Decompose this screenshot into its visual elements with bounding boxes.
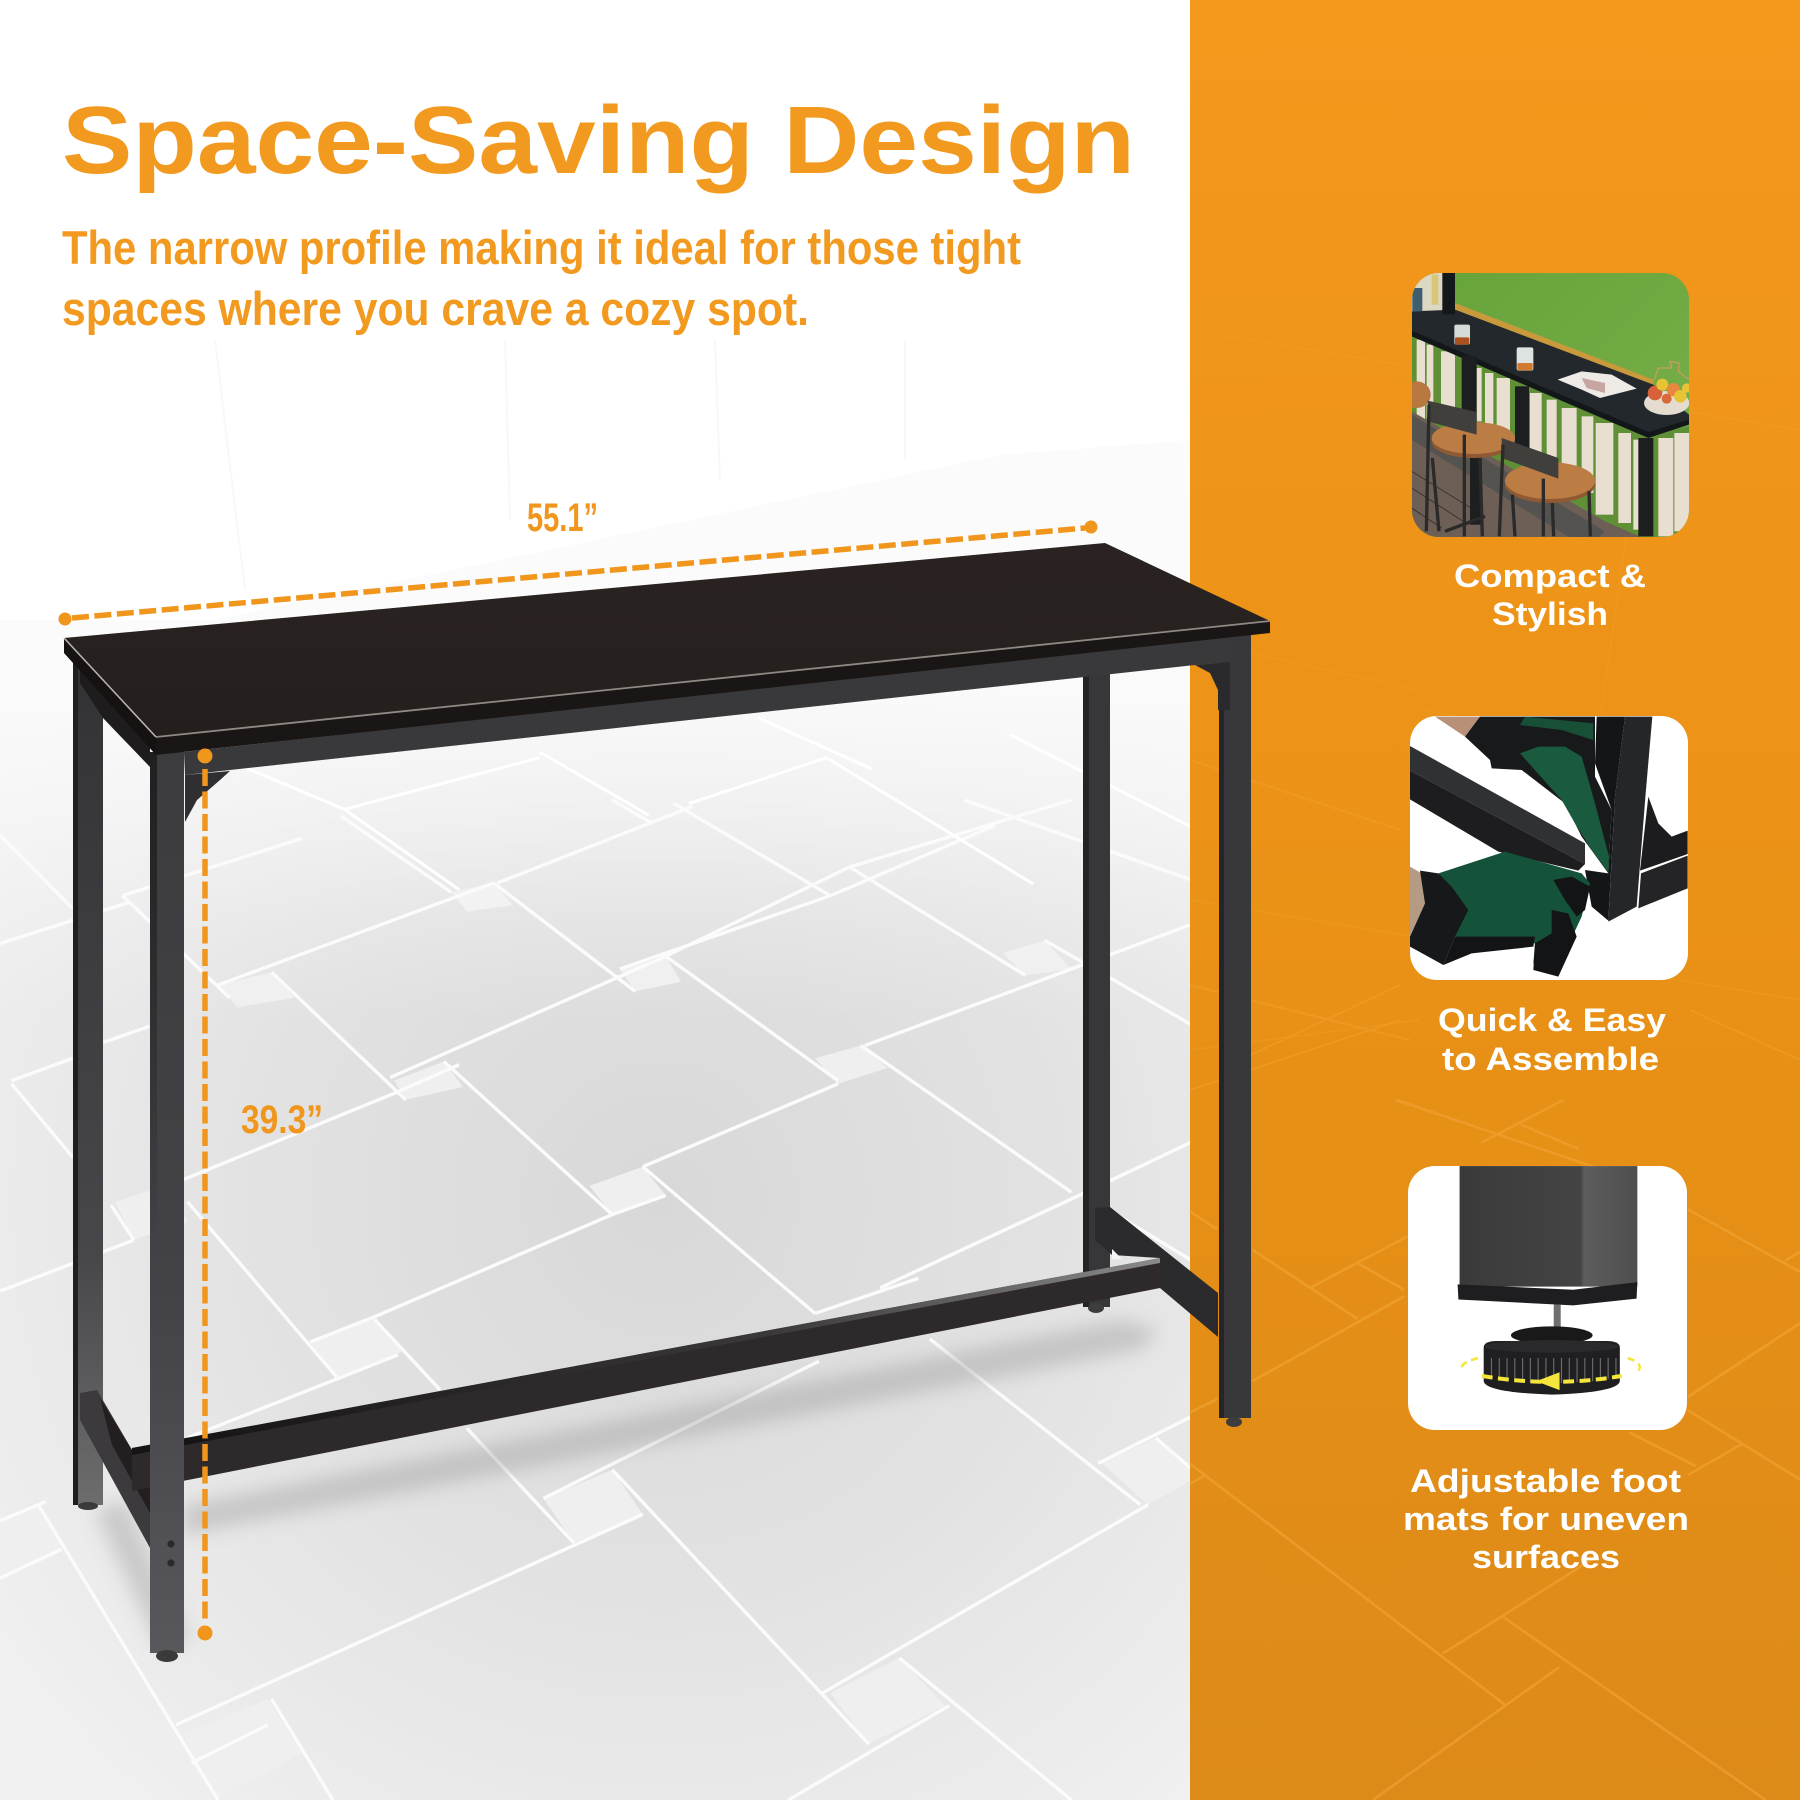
caption: Adjustable foot mats for uneven surfaces: Adjustable foot (1410, 1463, 1681, 1499)
back right leg (1083, 670, 1110, 1313)
photo: gloved hands assembling table (1410, 716, 1688, 980)
front left leg (150, 752, 184, 1662)
floor shadows (95, 1320, 1160, 1650)
height label: 39.3” (241, 1098, 323, 1142)
subtitle text: spaces where you crave a cozy spot. (62, 282, 809, 335)
caption: Quick & Easy to Assemble: Quick & Easy (1438, 1002, 1666, 1038)
right orange background panel with tile lines (1190, 0, 1800, 1800)
photo: adjustable foot close-up (1408, 1166, 1687, 1430)
photo: compact bar table on balcony (1403, 268, 1695, 543)
width dimension line (58, 520, 1098, 626)
subtitle text (62, 221, 1021, 335)
caption: Compact & Stylish: Stylish (1492, 596, 1608, 632)
height dimension line (198, 748, 212, 1640)
caption: Adjustable foot mats for uneven surfaces (1403, 1463, 1689, 1575)
left background panel: tiled floor and white wall (0, 0, 1200, 1800)
caption: Compact & Stylish: Compact & (1454, 558, 1646, 594)
caption: Quick & Easy to Assemble: to Assemble (1442, 1041, 1659, 1077)
subtitle text: The narrow profile making it ideal for those tight (62, 221, 1021, 274)
left side stretcher (80, 1390, 150, 1548)
width label: 55.1” (527, 496, 598, 540)
caption: Adjustable foot mats for uneven surfaces: surfaces (1472, 1539, 1620, 1575)
table product illustration (64, 543, 1270, 1662)
apron under tabletop (80, 633, 1251, 822)
caption: Quick & Easy to Assemble (1438, 1002, 1666, 1077)
caption: Compact & Stylish (1454, 558, 1646, 632)
long stretcher (132, 1258, 1160, 1491)
right side stretcher (1095, 1207, 1218, 1337)
title: Space-Saving Design (62, 87, 1135, 194)
caption: Adjustable foot mats for uneven surfaces: mats for uneven (1403, 1501, 1689, 1537)
tabletop (64, 543, 1270, 755)
front right leg (1219, 640, 1251, 1427)
back left leg (73, 662, 103, 1510)
